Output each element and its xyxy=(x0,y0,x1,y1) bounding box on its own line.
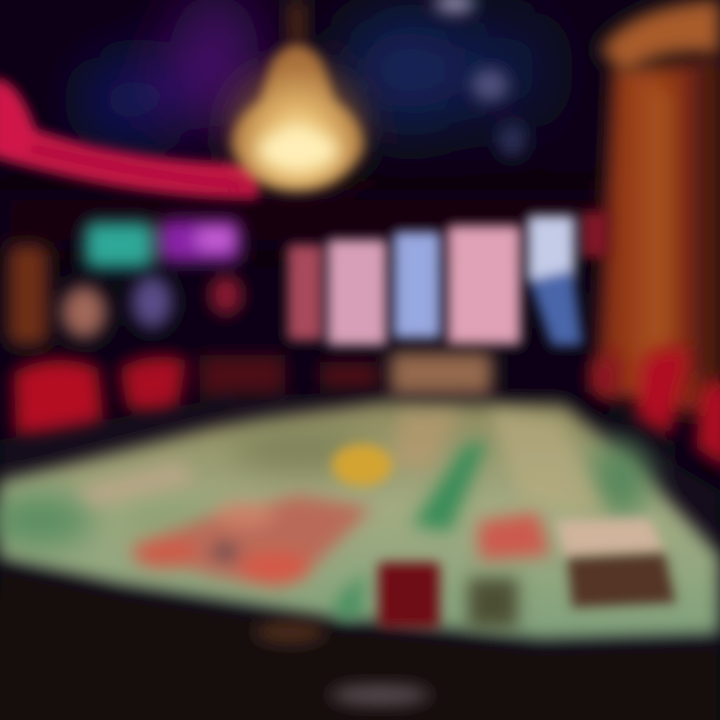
neon signs xyxy=(85,220,240,268)
left room lights xyxy=(8,245,242,345)
card deck top xyxy=(556,518,665,558)
red ribbon xyxy=(0,79,258,198)
pale label area xyxy=(75,462,195,505)
screens xyxy=(288,212,608,345)
dark green chip stack xyxy=(468,578,518,628)
chip stacks and cards xyxy=(378,518,676,628)
right column xyxy=(596,0,720,420)
table felt xyxy=(0,402,720,640)
red chairs xyxy=(14,349,720,470)
yellow chips xyxy=(332,444,392,486)
chandelier xyxy=(227,0,367,190)
pale lanes on felt xyxy=(390,410,610,520)
card deck side xyxy=(567,553,676,608)
red betting squares xyxy=(130,495,550,588)
dark band behind the screens xyxy=(0,190,620,250)
felt shading xyxy=(0,430,650,548)
table betting layout xyxy=(75,410,610,622)
sign stand xyxy=(390,352,492,410)
ceiling lights xyxy=(435,0,526,156)
dark table edge behind felt xyxy=(0,395,720,540)
front table rail xyxy=(0,572,720,720)
red chip stack xyxy=(378,562,440,628)
green stripes xyxy=(335,440,488,622)
ceiling glow: purple and blue xyxy=(80,0,555,145)
